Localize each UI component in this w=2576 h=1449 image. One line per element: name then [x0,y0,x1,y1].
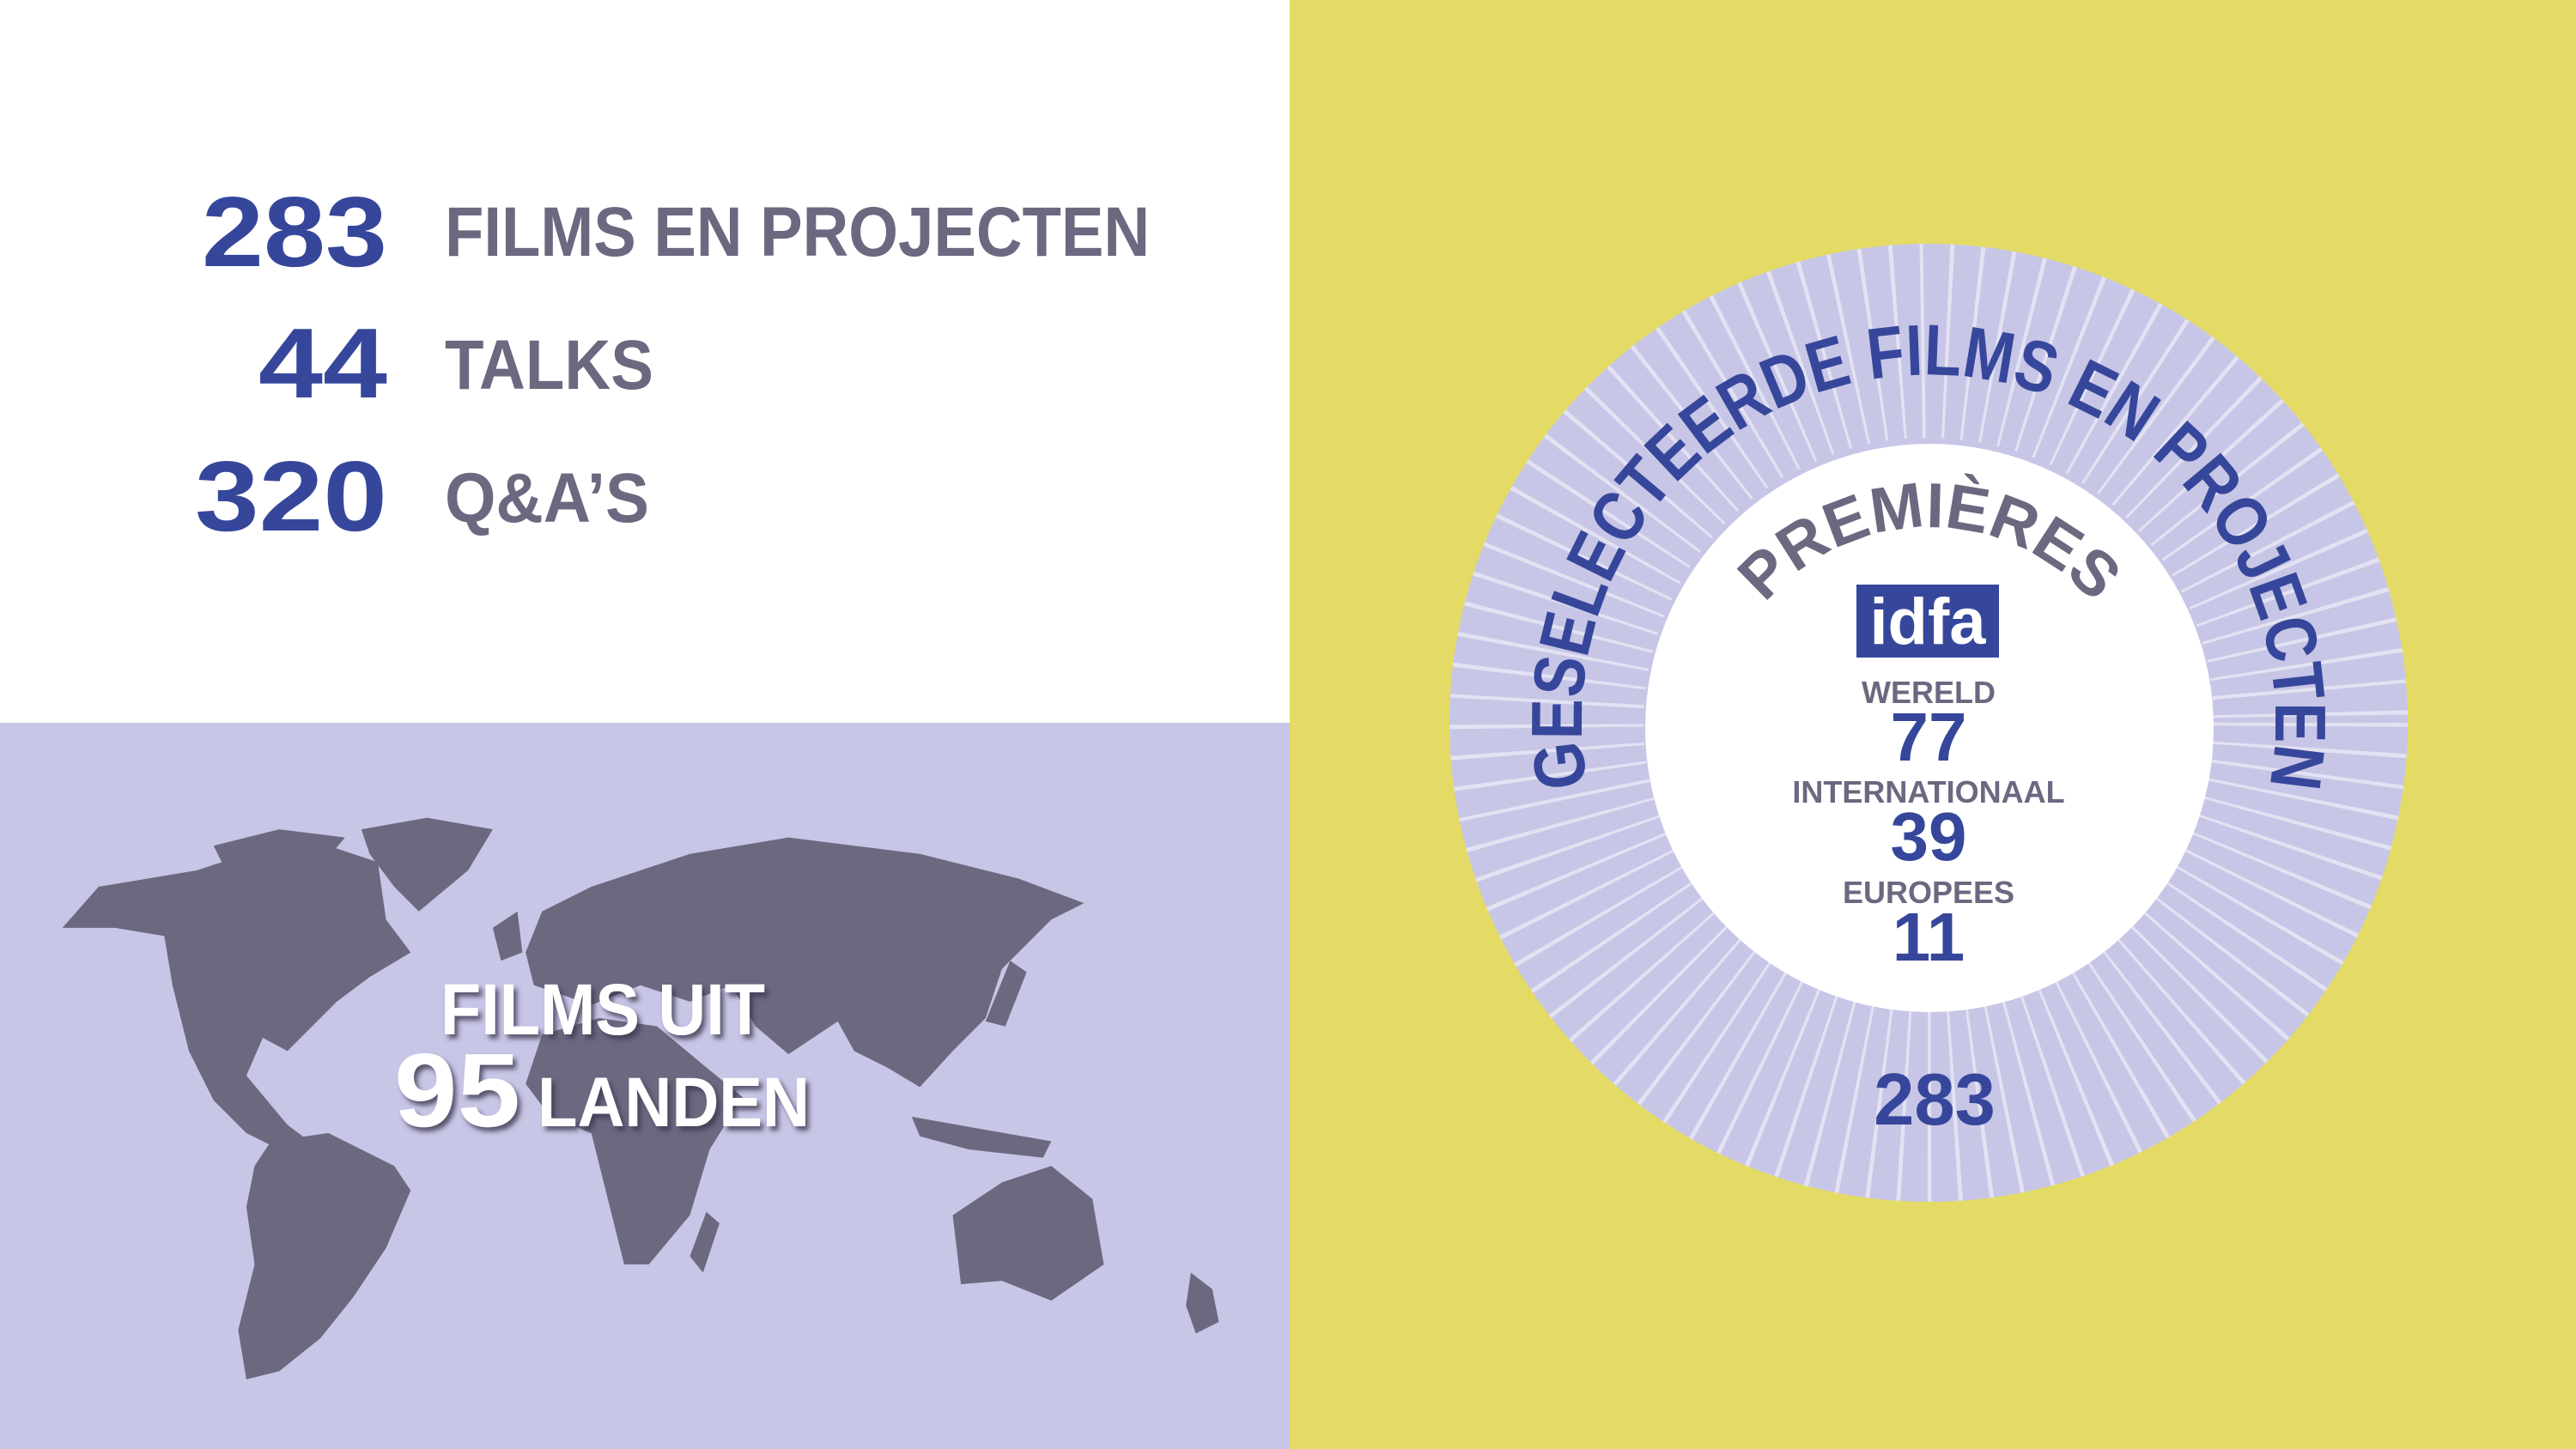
premieres breakdown: WERELD [1862,675,1996,710]
text: films uit 95 landen: FILMS UIT [440,969,765,1050]
panel: stats [0,0,1290,723]
premieres breakdown: 39 [1891,798,1966,875]
stat: 283 films en projecten: FILMS EN PROJECTEN [445,193,1150,271]
premieres breakdown [1792,675,2065,975]
premieres breakdown: INTERNATIONAAL [1792,774,2065,809]
stat: 44 talks: TALKS [445,326,653,404]
stat: 44 talks [258,307,653,419]
map: continents [63,818,1218,1379]
premieres breakdown: EUROPEES [1843,875,2014,910]
premieres breakdown: 77 [1891,699,1966,775]
premieres breakdown: 11 [1893,899,1965,975]
logo: idfa: idfa [1869,585,1986,658]
panel: premieres circle [1449,244,2408,1202]
curved heading: geselecteerde films en projecten: GESELECTEERDE FILMS EN PROJECTEN [1532,324,2325,788]
text: films uit 95 landen: LANDEN [538,1064,810,1142]
ring [1449,244,2408,1202]
panel: world map [0,723,1290,1449]
text: films uit 95 landen: 95 [394,1032,520,1149]
text: films uit 95 landen [394,969,810,1149]
stat: 320 q&a's [195,440,649,552]
stat: 320 q&a's: 320 [195,440,387,552]
stat: 320 q&a's: Q&A’S [445,459,649,537]
curved heading: premières: PREMIÈRES [1736,473,2117,600]
total: 283: 283 [1874,1059,1996,1141]
stat: 283 films en projecten [202,176,1150,288]
stat: 283 films en projecten: 283 [202,176,387,288]
inner white disc [1645,444,2214,1012]
stat: 44 talks: 44 [258,307,387,419]
